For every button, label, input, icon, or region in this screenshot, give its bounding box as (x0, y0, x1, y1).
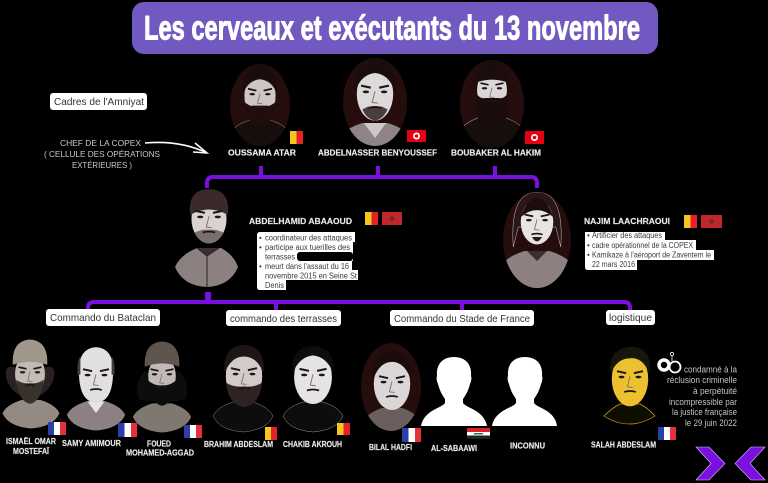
label: Commando du Stade de France: Commando du Stade de France (394, 313, 530, 325)
icon: handcuffs (659, 352, 680, 372)
connector: leaders bracket (207, 166, 537, 188)
text block: Abaaoud details (257, 232, 358, 290)
portrait: Ismaël Omar Mostefaï (2, 340, 59, 428)
text block: Abaaoud details: Denis (265, 281, 284, 290)
portrait: Boubaker Al Hakim (459, 60, 525, 150)
flag: France (Mostefaï) (48, 422, 66, 435)
text block: Salah sentence (667, 364, 737, 428)
flag: France (Salah) (658, 427, 676, 440)
text block: Abaaoud details: • (259, 262, 262, 271)
portrait: Brahim Abdeslam (213, 345, 273, 432)
name: Foued Mohamed-Aggad: MOHAMED-AGGAD (126, 448, 194, 458)
portrait: Salah Abdeslam (604, 346, 655, 424)
portrait: Abdelnasser Benyoussef (343, 58, 407, 146)
arrow to Oussama Atar (145, 142, 207, 153)
label: Commando du Stade de France (390, 310, 534, 326)
text block: Laachraoui details (585, 231, 714, 270)
annotation: chef de la COPEX (44, 138, 160, 170)
text block: Laachraoui details: • (587, 231, 590, 240)
flag: France (Hadfi) (402, 428, 421, 442)
flag: Belgium (Brahim) (265, 427, 277, 440)
portrait: Samy Amimour (67, 347, 125, 430)
text block: Abaaoud details: participe aux tuerilles des (265, 243, 350, 252)
portrait: Abdelhamid Abaaoud (175, 189, 238, 287)
name: Ismaël Omar Mostefaï: MOSTEFAÏ (13, 446, 49, 456)
name: Samy Amimour: SAMY AMIMOUR (62, 438, 122, 448)
title banner (132, 2, 658, 54)
name: Boubaker Al Hakim: BOUBAKER AL HAKIM (451, 148, 541, 158)
portrait: Bilal Hadfi (361, 343, 421, 431)
name: Ismaël Omar Mostefaï: ISMAËL OMAR (6, 436, 57, 446)
text block: Laachraoui details: Artificier des attaques (592, 231, 662, 240)
name: Najim Laachraoui: NAJIM LAACHRAOUI (584, 216, 670, 226)
flag: Tunisia (Benyoussef) (407, 130, 426, 142)
portrait: Najim Laachraoui (500, 192, 574, 288)
text block: Laachraoui details: • (587, 250, 590, 260)
flag: France (Amimour) (118, 423, 137, 437)
text block: Salah sentence: incompressible par (669, 397, 737, 407)
portrait: Chakib Akrouh (283, 346, 343, 432)
silhouette: Inconnu (492, 357, 557, 426)
flag: Iraq (467, 428, 490, 439)
label: Cadres de l'Amniyat: Cadres de l'Amniyat (54, 96, 144, 108)
text block: Abaaoud details: • (259, 243, 262, 252)
flag: Morocco (Laachraoui) (701, 215, 722, 228)
icon: chevrons (696, 447, 765, 480)
silhouette: Al-Sabaawi (421, 357, 487, 426)
name: Abdelnasser Benyoussef: ABDELNASSER BENYOUSSEF (318, 148, 437, 158)
label: Commando du Bataclan (46, 309, 160, 326)
annotation: chef de la COPEX: ( CELLULE DES OPÉRATIONS (44, 149, 160, 159)
name: Brahim Abdeslam: BRAHIM ABDESLAM (204, 439, 273, 449)
text block: Abaaoud details: novembre 2015 en Seine St (265, 272, 358, 280)
text block: Salah sentence: à perpétuité (693, 386, 737, 396)
flag: France (Mohamed-Aggad) (184, 425, 202, 438)
portrait: Foued Mohamed-Aggad (133, 342, 191, 432)
label: commando des terrasses: commando des terrasses (230, 313, 337, 325)
label: Commando du Bataclan: Commando du Bataclan (50, 312, 156, 324)
name: Ismaël Omar Mostefaï (6, 436, 57, 456)
label: logistique: logistique (609, 312, 652, 324)
label: commando des terrasses (226, 310, 341, 326)
text block: Abaaoud details: coordinateur des attaques (265, 234, 352, 242)
text block: Abaaoud details: • (259, 234, 262, 242)
name: Bilal Hadfi: BILAL HADFI (369, 442, 412, 452)
text block: Salah sentence: la justice française (672, 407, 737, 417)
text block: Laachraoui details: Kamikaze à l'aéroport de Zaventem le (592, 250, 711, 260)
text block: Laachraoui details: 22 mars 2016 (592, 260, 635, 269)
name: Salah Abdeslam: SALAH ABDESLAM (591, 440, 656, 450)
flag: Belgium (Abaaoud) (365, 212, 378, 225)
flag: Belgium (Chakib) (337, 423, 350, 435)
name: Abdelhamid Abaaoud: ABDELHAMID ABAAOUD (249, 216, 352, 226)
text block: Salah sentence: le 29 juin 2022 (685, 418, 737, 428)
name: Inconnu: INCONNU (510, 440, 545, 450)
text block: Salah sentence: réclusion criminelle (667, 375, 737, 385)
name: Chakib Akrouh: CHAKIB AKROUH (283, 439, 342, 449)
connector: commandos bracket (88, 292, 630, 311)
flag: Tunisia (Al Hakim) (525, 131, 544, 144)
text block: Laachraoui details: cadre opérationnel de la COPEX (592, 241, 694, 250)
name: Foued Mohamed-Aggad: FOUED (147, 438, 171, 448)
label: Cadres de l'Amniyat (50, 93, 147, 110)
flag: Morocco (Abaaoud) (382, 212, 402, 225)
portrait: Oussama Atar (230, 64, 290, 150)
flag: Belgium (Atar) (290, 131, 303, 144)
flag: Belgium (Laachraoui) (684, 215, 697, 228)
text block: Laachraoui details: • (587, 241, 590, 250)
text block: Salah sentence: condamné à la (684, 364, 737, 374)
name: Foued Mohamed-Aggad (126, 438, 194, 458)
name: Oussama Atar: OUSSAMA ATAR (228, 148, 297, 158)
annotation: chef de la COPEX: EXTÉRIEURES ) (72, 160, 132, 170)
annotation: chef de la COPEX: CHEF DE LA COPEX (60, 138, 141, 148)
text block: Abaaoud details: terrasses (265, 252, 295, 262)
text block: Abaaoud details: meurt dans l'assaut du 16 (265, 262, 350, 271)
name: Al-Sabaawi: AL-SABAAWI (431, 443, 477, 453)
